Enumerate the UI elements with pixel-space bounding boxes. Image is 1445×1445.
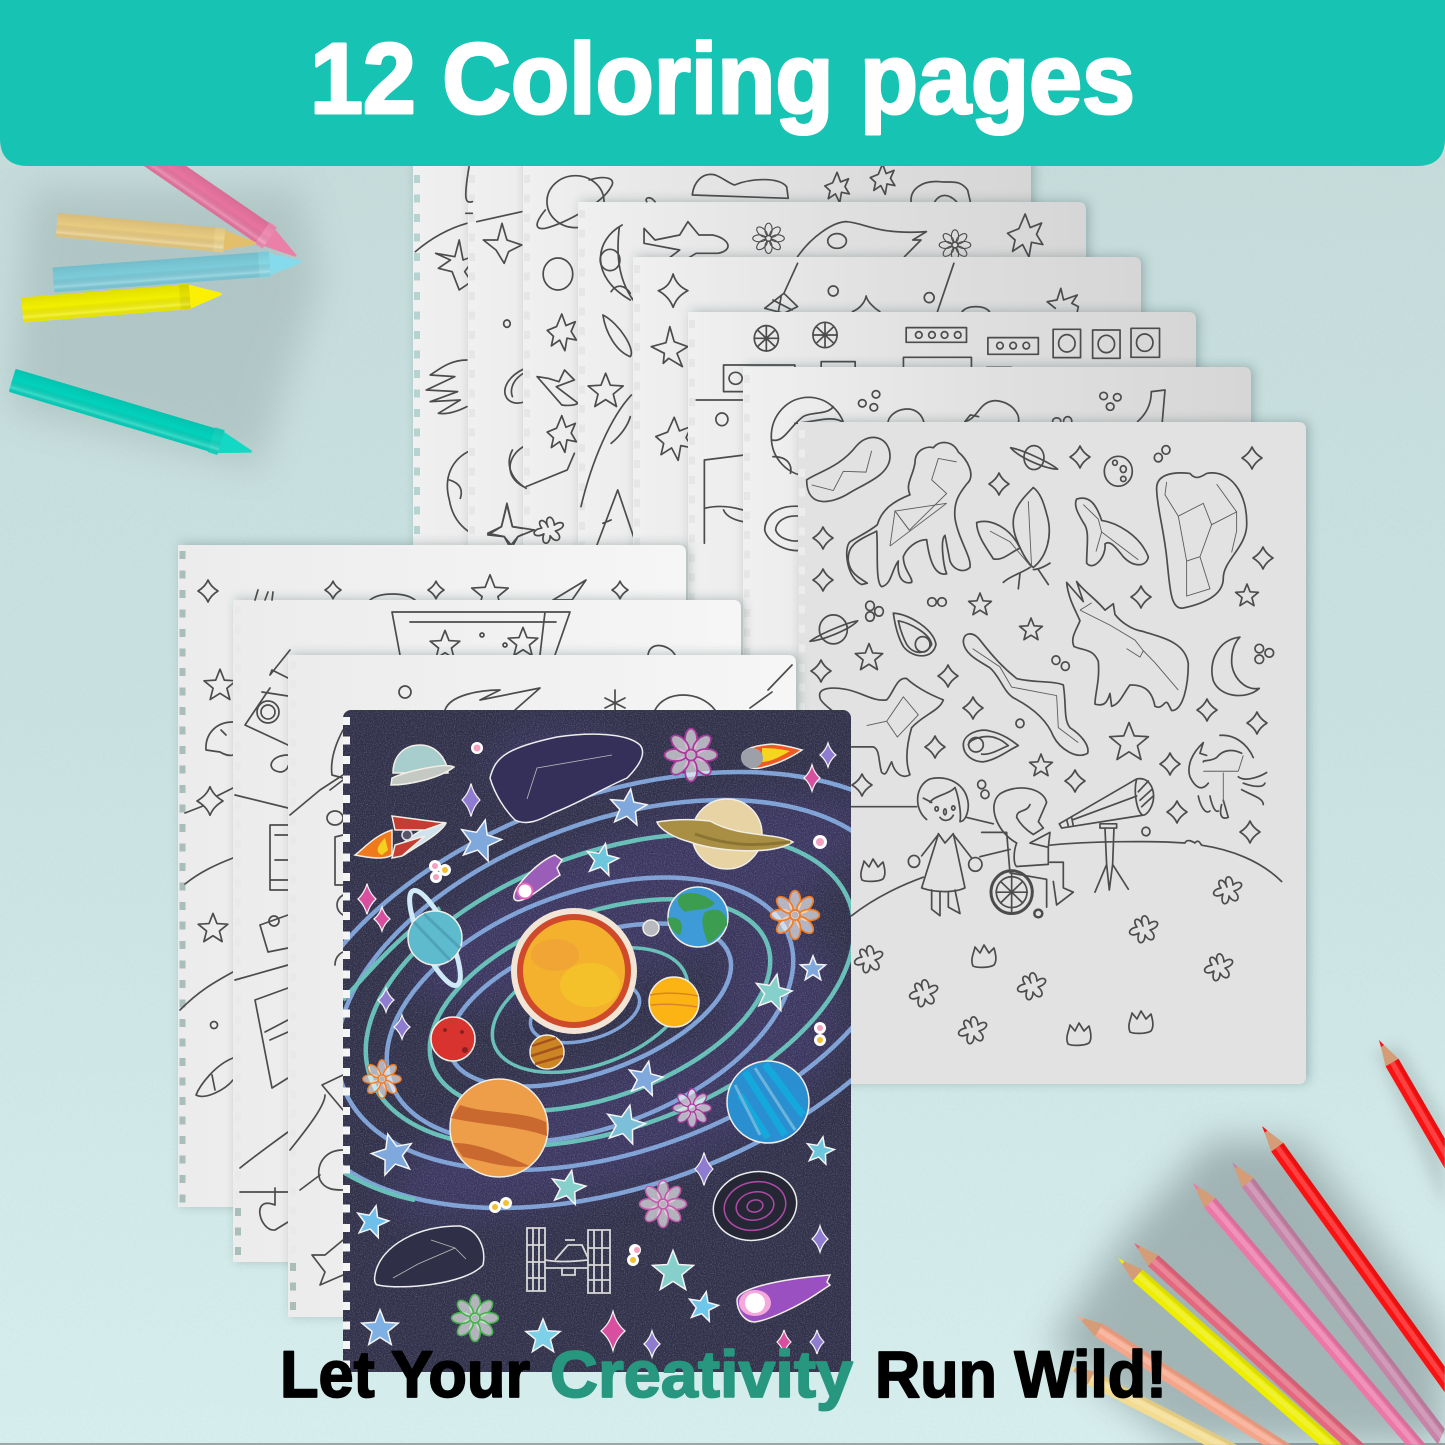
sheet 6 [688,312,1196,974]
nebula patches [391,726,851,1224]
cover sparkles [358,743,836,1357]
upper stack of coloring sheets [413,37,1306,1084]
lower stack of coloring sheets [178,545,796,1317]
sheet 3 [488,147,1031,809]
crayon: yellow [21,281,223,323]
sun [511,908,637,1034]
crayon: tan [56,213,257,255]
sheet 1 [413,37,921,699]
constellation blobs, galaxy and space station [375,734,803,1293]
cover stars [353,786,836,1352]
title banner [0,0,1445,166]
saturn [657,799,793,869]
tagline: Run Wild! [875,1337,1167,1411]
tagline: Let Your [280,1337,530,1411]
comet purple [514,855,562,901]
cover: solar system illustration [343,710,851,1372]
crayon: light blue [52,249,303,293]
rocket [355,816,446,858]
lower sheet 3 [288,655,796,1317]
comet orange [741,744,802,768]
moon [643,920,659,936]
speckle texture [343,710,851,1372]
lower sheet 1 [178,545,686,1207]
galaxy [707,1164,803,1248]
tagline: Creativity [550,1337,853,1411]
constellation top [490,734,643,822]
uranus [407,888,463,988]
crayon: pink [124,132,303,267]
pencil: red top right [1373,1036,1445,1168]
pencil: rose [1129,1237,1364,1445]
colored pencils group [1050,1036,1445,1445]
tagline [280,1337,1167,1411]
comets, rocket and ufo [355,744,830,1322]
cover dots [429,742,827,1266]
ufo [391,745,454,785]
pencil: cream [1065,1359,1237,1445]
sheet 4 [578,198,1086,864]
orbit rings [343,770,851,1210]
crayons group [8,132,320,470]
cover spiral holes [343,717,350,1372]
earth [668,887,728,947]
pencil: salmon [1073,1310,1291,1445]
sheet 5 [633,257,1141,919]
yellow planet [649,977,699,1027]
sheet 2 [466,92,976,754]
pencil: red [1256,1122,1445,1392]
title: 12 Coloring pages [310,23,1135,135]
small brown planet [530,1035,564,1069]
space station [527,1228,610,1293]
cover flowers [363,729,819,1342]
comet large [737,1275,830,1322]
planets [400,799,809,1177]
star and flower doodles [811,446,1273,1045]
constellations and characters line art [807,437,1282,917]
pencil: mauve [1226,1157,1445,1445]
sheet 7 [743,367,1251,1029]
front coloring sheet: constellations and stargazers [798,422,1306,1084]
lower sheet 2 [233,590,741,1262]
red planet [431,1017,475,1061]
crayon: teal [8,368,255,464]
pencil: yellow [1113,1252,1342,1445]
constellation bottom [375,1226,484,1287]
neptune [727,1061,809,1143]
jupiter [450,1079,548,1177]
pencil: pink [1187,1178,1426,1445]
